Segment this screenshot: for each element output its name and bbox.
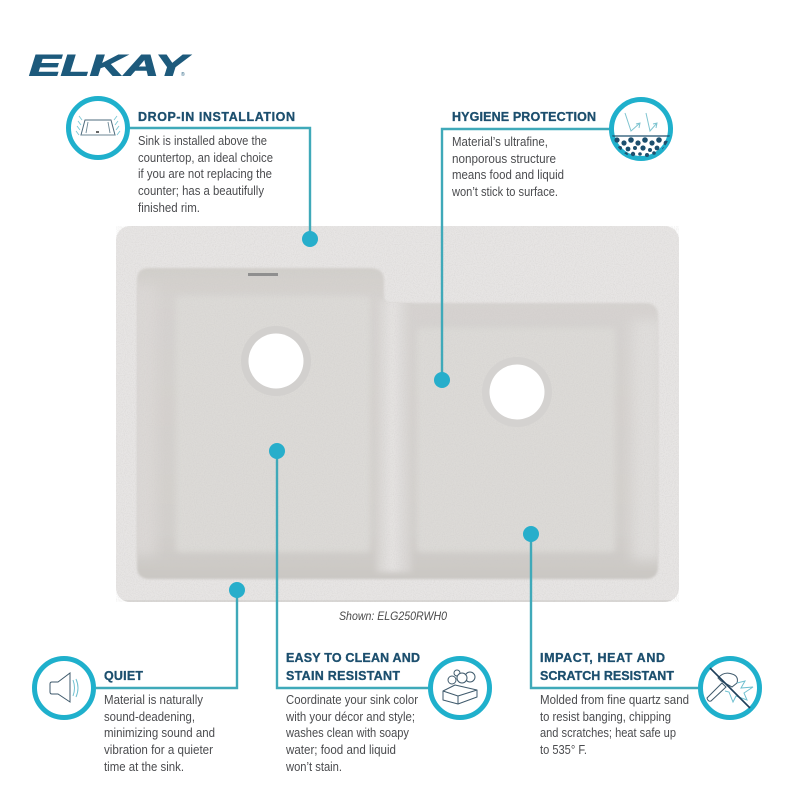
body text: and scratches; heat safe up (540, 726, 676, 740)
icon: speaker (34, 658, 94, 718)
body text: minimizing sound and (104, 726, 215, 740)
leader line: easy to clean (269, 443, 428, 688)
panel: drop-in installation (68, 98, 295, 215)
panel: hygiene protection (451, 100, 672, 199)
leader line: quiet (96, 582, 245, 688)
body text: won’t stain. (285, 760, 342, 774)
right drain (482, 357, 552, 427)
heading: STAIN RESISTANT (286, 669, 400, 683)
heading: IMPACT, HEAT AND (540, 651, 665, 665)
heading: DROP-IN INSTALLATION (138, 110, 295, 124)
body text: washes clean with soapy (285, 726, 410, 740)
body text: Molded from fine quartz sand (540, 693, 689, 707)
heading: SCRATCH RESISTANT (540, 669, 674, 683)
icon: nonporous surface (610, 100, 672, 158)
body text: if you are not replacing the (138, 167, 272, 181)
body text (138, 134, 273, 215)
body text: with your décor and style; (285, 710, 415, 724)
product image: sink (116, 226, 679, 602)
body text: sound-deadening, (104, 710, 195, 724)
body text (104, 693, 215, 774)
panel: quiet (34, 658, 215, 774)
body text: Coordinate your sink color (286, 693, 418, 707)
leader line: hygiene protection (434, 129, 610, 388)
body text: nonporous structure (452, 152, 556, 166)
body text (285, 693, 418, 774)
body text (540, 693, 689, 757)
body text: Sink is installed above the (138, 134, 267, 148)
body text: Material’s ultrafine, (452, 135, 548, 149)
logo: Elkay: ® (181, 71, 185, 78)
body text: Material is naturally (104, 693, 204, 707)
body text: won’t stick to surface. (451, 185, 558, 199)
body text: means food and liquid (452, 168, 564, 182)
body text: to 535° F. (540, 743, 587, 757)
body text: vibration for a quieter (104, 743, 213, 757)
logo: Elkay (29, 50, 192, 82)
heading: EASY TO CLEAN AND (286, 651, 420, 665)
leader line: impact (523, 526, 698, 688)
icon: soap bar (430, 658, 490, 718)
body text: water; food and liquid (285, 743, 396, 757)
panel: impact, heat and scratch resistant (540, 651, 760, 757)
heading (540, 651, 674, 683)
body text: to resist banging, chipping (540, 710, 671, 724)
heading: QUIET (104, 669, 143, 683)
caption: Shown: ELG250RWH0 (339, 609, 447, 623)
body text (451, 135, 564, 199)
sink overflow (248, 273, 278, 276)
body text: time at the sink. (104, 760, 184, 774)
panel: easy to clean and stain resistant (285, 651, 490, 774)
body text: countertop, an ideal choice (138, 151, 273, 165)
icon: hammer crossed out (700, 658, 760, 718)
heading (286, 651, 420, 683)
logo: Elkay: ELKAY (29, 50, 192, 82)
left drain (241, 326, 311, 396)
leader line: drop-in installation (129, 128, 318, 247)
icon: drop-in sink (68, 98, 128, 158)
body text: finished rim. (138, 201, 200, 215)
heading: HYGIENE PROTECTION (452, 110, 596, 124)
body text: counter; has a beautifully (138, 184, 265, 198)
